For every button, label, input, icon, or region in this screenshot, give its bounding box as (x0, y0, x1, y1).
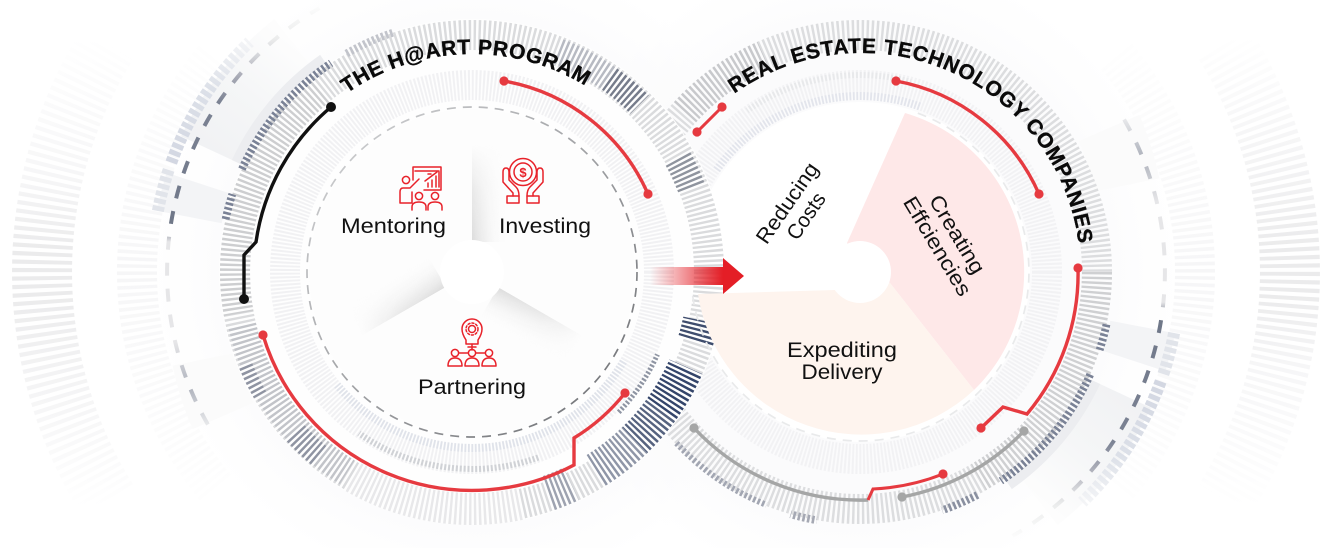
left arc: black (244, 107, 331, 299)
background decoration: left circle outer rings (42, 8, 323, 500)
left circle tick rings (220, 20, 724, 525)
right arc: gray bottom left with red tail (689, 423, 948, 500)
label: reducing costs: Reducing (752, 158, 823, 248)
right arc: red top (891, 76, 1044, 199)
right arc: short red (692, 102, 727, 137)
icon: investing: $ (519, 165, 527, 180)
label: reducing costs: Costs (782, 188, 831, 244)
left arc: red top (504, 81, 648, 194)
icon: partnering (448, 319, 496, 366)
pie segment: creating efficiencies (847, 113, 1024, 390)
left dashed ring (307, 107, 637, 437)
heading: the h@art program: THE H@ART PROGRAM (338, 39, 592, 91)
pie segment: expediting delivery (698, 283, 974, 435)
icon: investing (503, 158, 543, 203)
left circle hub (440, 240, 504, 304)
left arc dots: red top (499, 76, 653, 199)
heading: real estate technology companies: REAL ESTATE TECHNOLOGY COMPANIES (727, 38, 1092, 242)
right circle hub (829, 241, 891, 303)
arrow from program to companies (650, 258, 744, 294)
right pale dashed ring (693, 113, 1029, 441)
label: mentoring: Mentoring (341, 215, 446, 238)
label: investing: Investing (499, 215, 591, 238)
label: expediting delivery (787, 339, 897, 384)
right circle white disc (690, 102, 1030, 442)
label: partnering: Partnering (418, 376, 526, 399)
label: reducing costs (752, 158, 842, 261)
background decoration: right circle outer rings (1009, 44, 1290, 536)
left arc: red bottom (263, 335, 625, 490)
icon: mentoring (400, 167, 442, 210)
left arc dots: red bottom (258, 330, 630, 398)
left circle inner field (309, 109, 635, 435)
right circle tick rings (667, 20, 1112, 524)
label: expediting delivery: Delivery (802, 361, 883, 384)
label: expediting delivery: Expediting (787, 339, 897, 362)
right arc: red side (976, 263, 1083, 433)
left arc dots: black (239, 102, 336, 304)
left circle white disc (219, 19, 725, 525)
label: creating efficiencies: Effciencies (898, 193, 976, 300)
label: creating efficiencies (898, 181, 995, 300)
right arc: gray bottom right (897, 426, 1029, 502)
shaded dividers between the three segments (377, 162, 566, 329)
label: creating efficiencies: Creating (924, 191, 989, 278)
